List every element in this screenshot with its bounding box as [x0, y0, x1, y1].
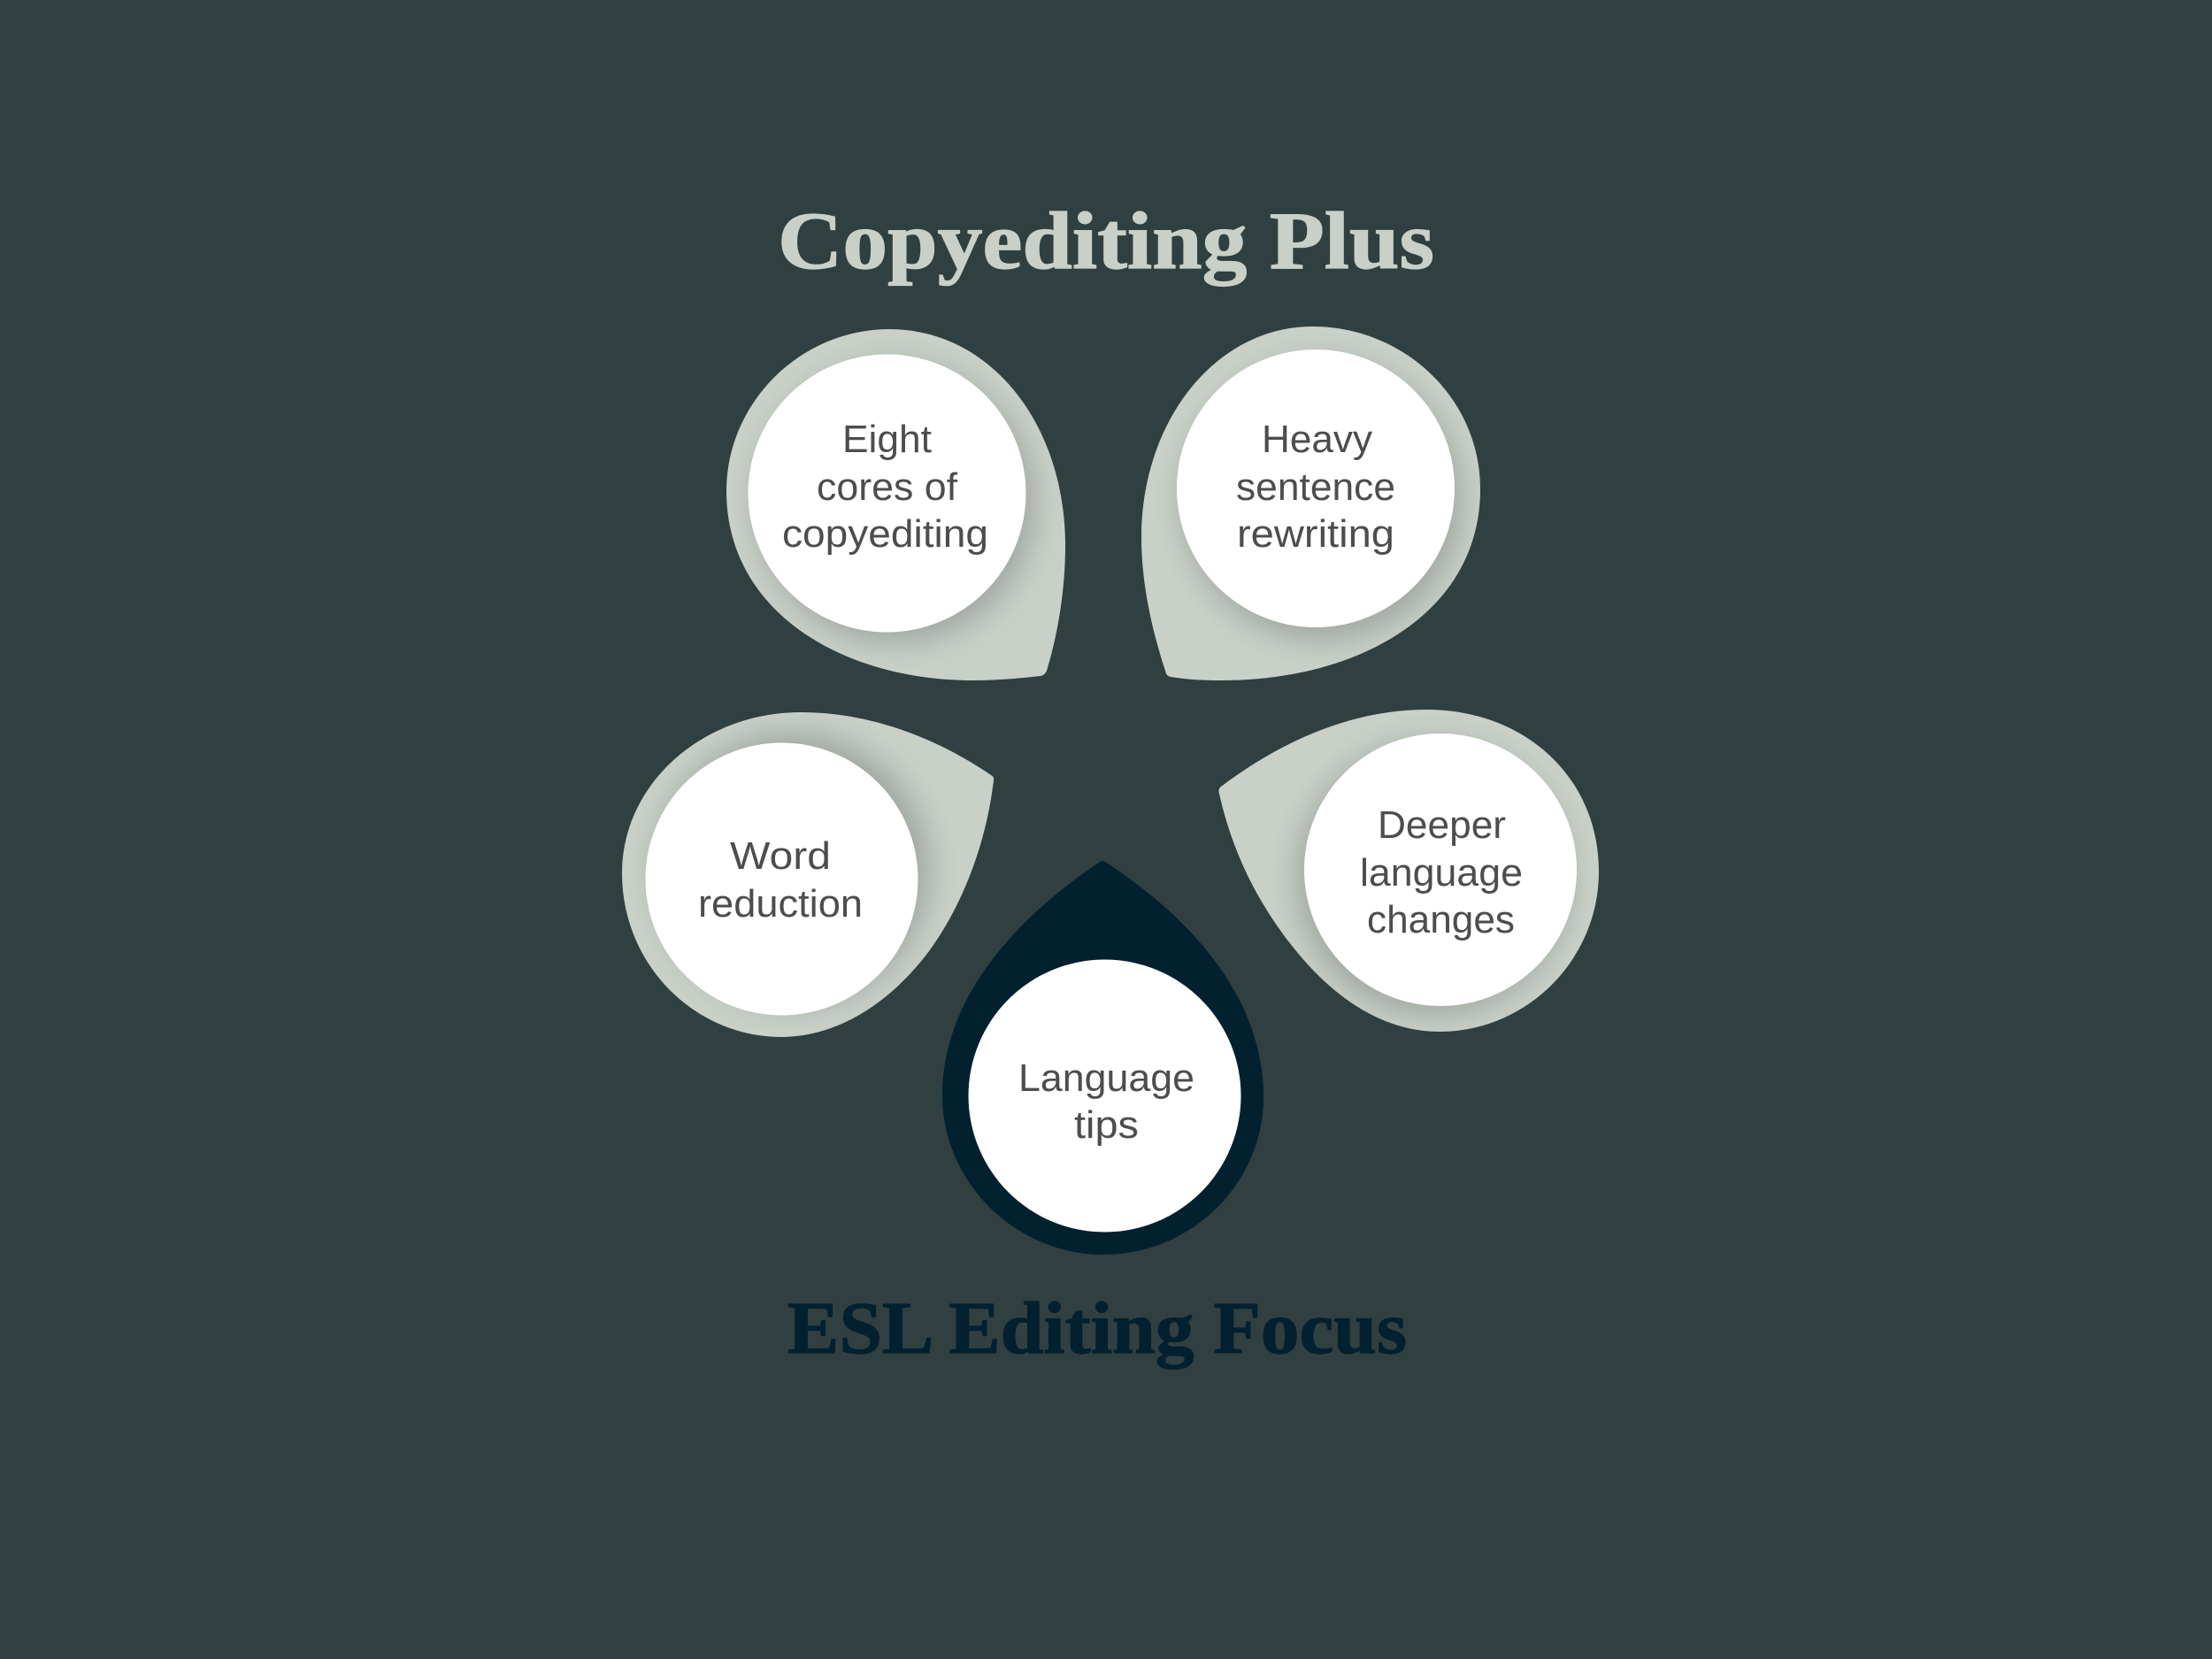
teardrop shape, middle right	[1218, 710, 1599, 1032]
circle shadow	[657, 733, 929, 1006]
label text: sentence	[1236, 465, 1395, 509]
circle shadow	[757, 365, 1034, 642]
label text: Heavy	[1262, 418, 1372, 461]
petal: Word reduction	[622, 712, 994, 1037]
petal: Deeper language changes	[1218, 710, 1599, 1032]
label text: copyediting	[782, 512, 988, 556]
teardrop shape, bottom dark	[942, 861, 1263, 1255]
label text	[698, 834, 863, 926]
white circle	[749, 354, 1026, 632]
teardrop shape, top left	[726, 329, 1065, 680]
petal: Heavy sentence rewriting	[1141, 326, 1480, 680]
heading: ESL Editing Focus: ESL Editing Focus	[787, 1287, 1407, 1370]
label text: Language	[1018, 1056, 1194, 1100]
petal: Eight cores of copyediting	[726, 329, 1065, 680]
label text: language	[1360, 851, 1523, 895]
label text: Deeper	[1378, 803, 1506, 847]
petal: Language tips	[942, 861, 1263, 1255]
title: Copyediting Plus: Copyediting Plus	[778, 196, 1434, 286]
label text: reduction	[698, 882, 863, 926]
white circle	[968, 959, 1240, 1232]
label text: rewriting	[1237, 512, 1394, 556]
label text: changes	[1367, 898, 1515, 941]
white circle	[1304, 733, 1577, 1006]
label text	[1236, 418, 1395, 556]
label text	[1018, 1056, 1194, 1147]
label text: Word	[730, 834, 831, 878]
label text: Eight	[842, 418, 932, 461]
label text: cores of	[817, 465, 958, 509]
label text: tips	[1074, 1103, 1139, 1147]
label text	[782, 418, 988, 556]
infographic canvas	[622, 211, 1599, 1370]
circle shadow	[1183, 362, 1461, 640]
white circle	[1177, 349, 1455, 627]
circle shadow	[1297, 742, 1570, 1015]
teardrop shape, middle left	[622, 712, 994, 1037]
white circle	[646, 743, 918, 1016]
label text	[1360, 803, 1523, 941]
teardrop shape, top right	[1141, 326, 1480, 680]
